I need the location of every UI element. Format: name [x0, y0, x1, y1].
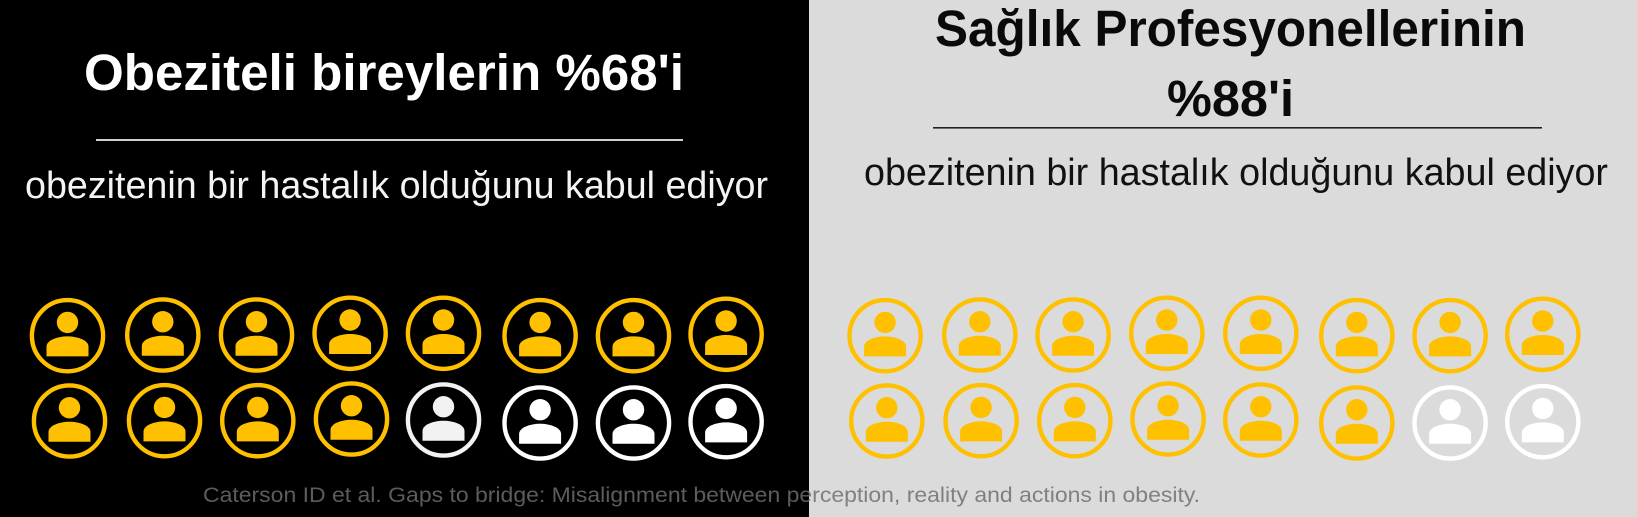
icon: person yellow	[221, 299, 292, 371]
icon: person yellow	[1225, 384, 1296, 456]
icon: person yellow	[1507, 299, 1578, 370]
icon: person yellow	[1321, 387, 1392, 459]
icon grid: 14 of 16 yellow persons	[850, 298, 1578, 459]
icon: person yellow	[690, 299, 762, 370]
icon: person yellow	[598, 300, 669, 371]
panel: healthcare professionals	[809, 0, 1637, 517]
footer: source citation: Caterson ID et al. Gaps to bridge: Misalignment between perception, reality and actions in obesity.	[203, 484, 1200, 507]
icon: person yellow	[1131, 298, 1202, 369]
icon: person yellow	[32, 300, 103, 371]
heading: obese individuals 68%: Obeziteli bireylerin %68'i	[84, 44, 684, 101]
panel: obese individuals	[0, 0, 809, 517]
icon: person yellow	[504, 300, 576, 371]
heading: 88%: %88'i	[1167, 70, 1294, 127]
text: accept obesity is a disease: obezitenin bir hastalık olduğunu kabul ediyor	[864, 152, 1608, 194]
icon: person yellow	[316, 383, 387, 455]
icon: person white	[1415, 387, 1486, 459]
icon: person yellow	[129, 385, 200, 456]
icon: person yellow	[1038, 299, 1109, 371]
icon: person white	[690, 386, 762, 457]
icon: person yellow	[1415, 300, 1486, 371]
icon: person yellow	[850, 300, 921, 371]
icon: person yellow	[1133, 383, 1204, 455]
icon: person white	[408, 384, 479, 456]
icon: person yellow	[34, 385, 105, 457]
icon: person white	[598, 387, 669, 459]
icon: person white	[504, 387, 576, 459]
icon: person yellow	[222, 385, 293, 456]
icon: person yellow	[1321, 300, 1392, 371]
icon: person yellow	[1039, 385, 1110, 456]
icon: person yellow	[946, 385, 1017, 456]
text: accept obesity is a disease: obezitenin bir hastalık olduğunu kabul ediyor	[25, 165, 768, 207]
icon: person yellow	[314, 298, 386, 369]
icon: person white	[1507, 386, 1578, 457]
icon: person yellow	[408, 298, 479, 369]
icon: person yellow	[127, 299, 198, 371]
icon: person yellow	[1225, 298, 1296, 369]
icon: person yellow	[851, 385, 922, 457]
heading: healthcare professionals: Sağlık Profesyonellerinin	[935, 0, 1526, 57]
icon: person yellow	[944, 299, 1015, 371]
icon grid: 12 of 16 yellow persons	[32, 298, 762, 459]
